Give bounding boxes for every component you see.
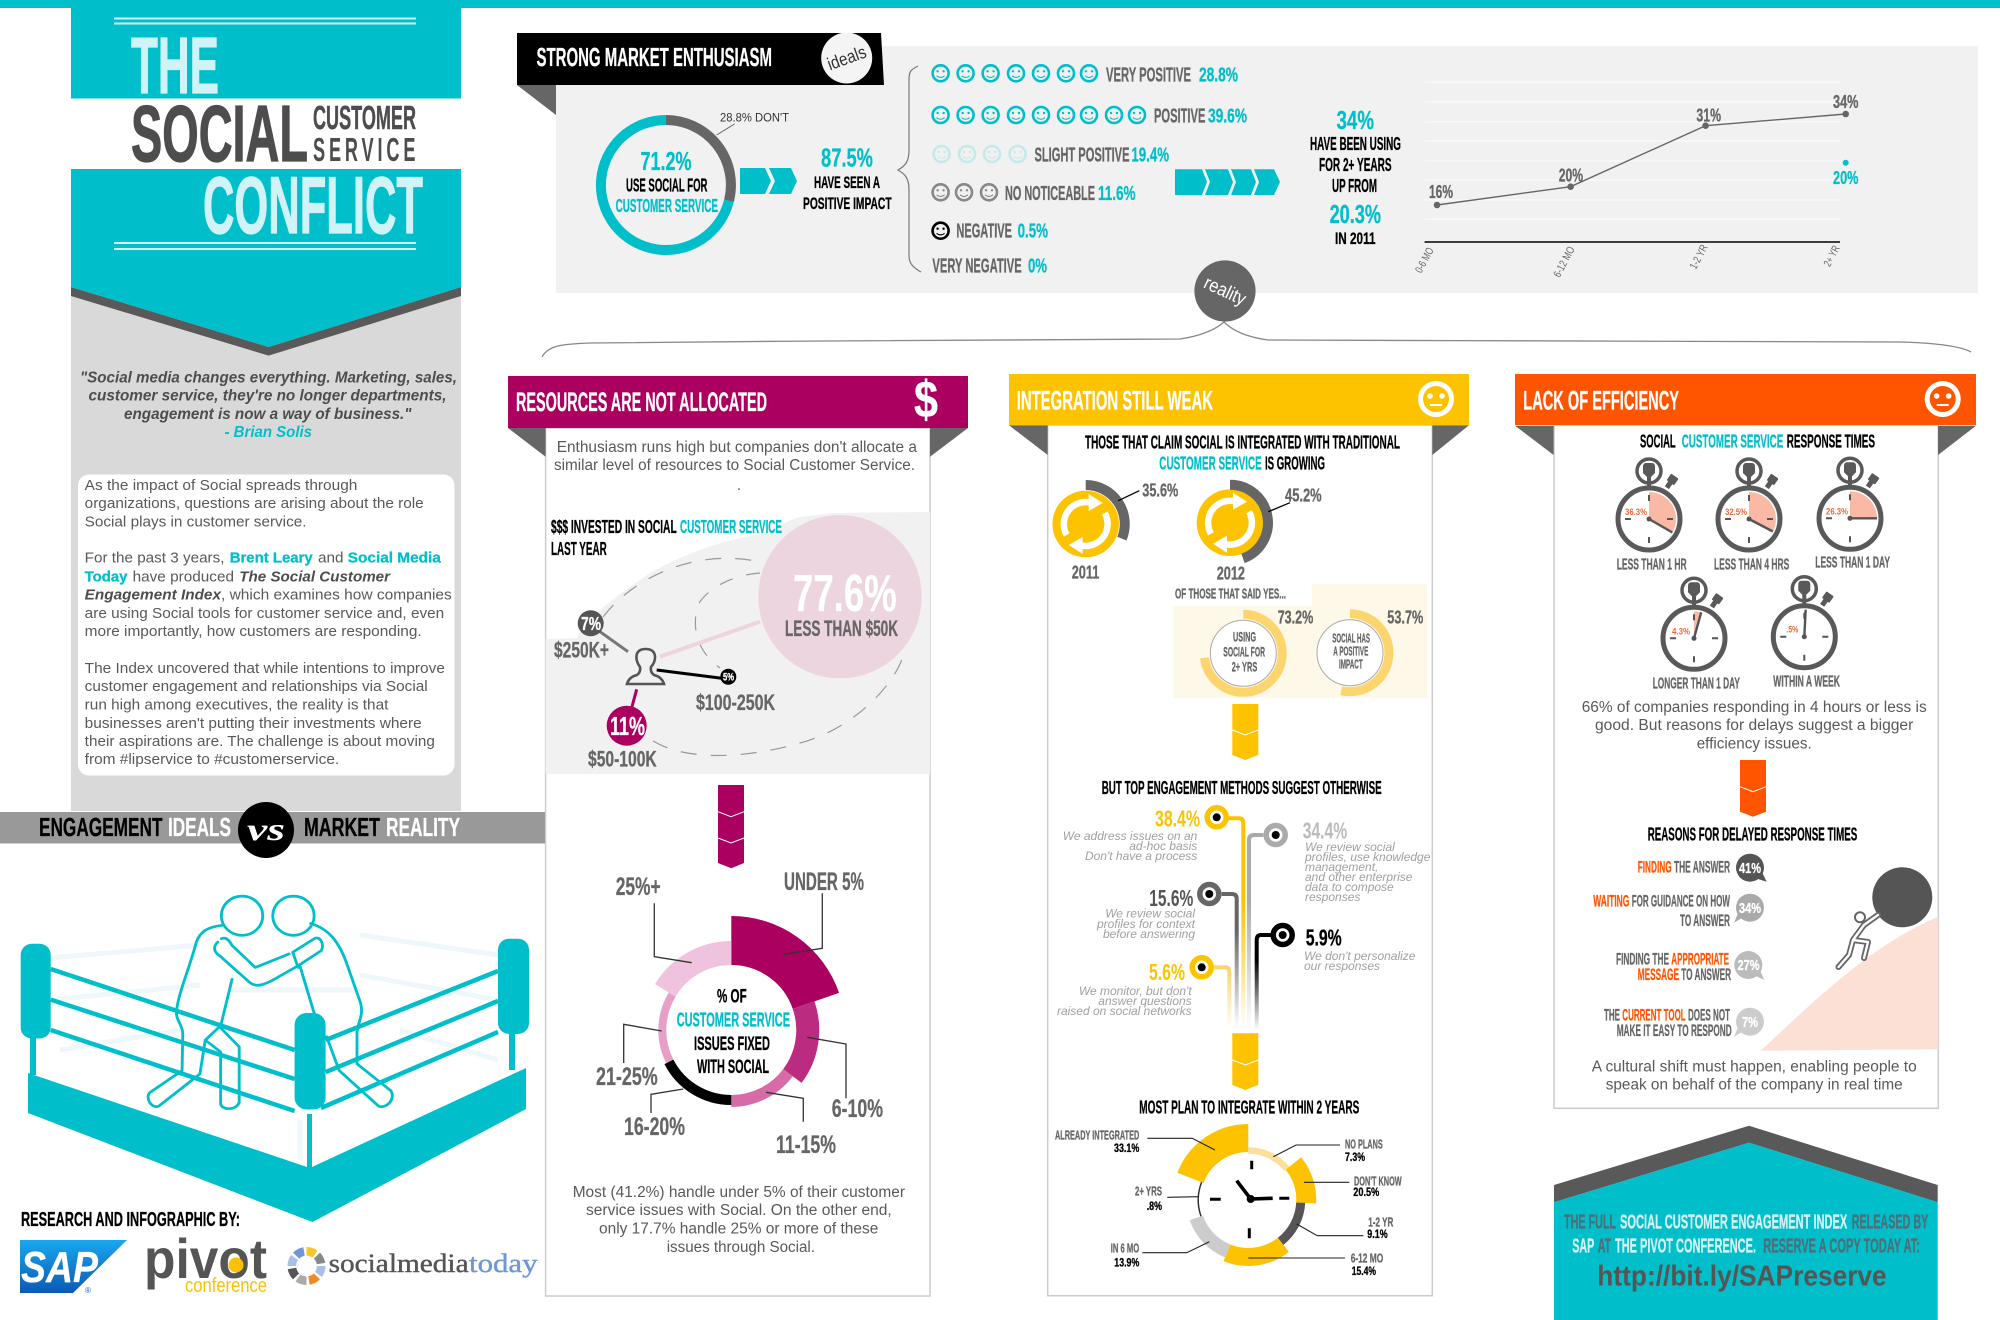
text block: introduction: Today [85,568,128,586]
reason: waiting for guidance [1593,892,1764,930]
chart: engagement methods timeline: We review social [1305,840,1395,854]
text block: introduction: The Index uncovered that while intentions to improve [85,660,445,677]
chart: clock of integration plans: 6-12 MO [1351,1251,1383,1266]
logo: socialmediatoday: socialmedia [329,1249,469,1278]
quote [80,370,457,441]
chart: clock of integration plans: .8% [1147,1199,1162,1213]
chart: % of issues fixed with social [596,868,883,1159]
row: very negative: VERY NEGATIVE [932,256,1022,278]
reason: current tool: 7% [1742,1015,1758,1031]
chart: engagement methods timeline: We review social [1105,906,1195,920]
text block: introduction: from #lipservice to #customerservice. [85,751,339,768]
row: no noticeable: NO NOTICEABLE [1005,183,1095,205]
text block: introduction: more importantly, how customers are responding. [85,623,422,640]
chart: 2011 circle: 35.6% [1142,481,1178,501]
chart: money invested bubbles [551,515,922,772]
row: very positive: 28.8% [1199,65,1238,87]
text block: introduction: run high among executives, the reality is that [85,697,389,714]
reason: finding the appropriate message [1616,949,1764,984]
reason: finding the answer [1638,854,1767,882]
chart: engagement methods timeline: Don't have a process [1085,849,1197,863]
banner: engagement ideals vs market reality: MARKET [304,812,380,842]
line chart: 1-2 YR [1688,243,1711,271]
banner: LACK OF EFFICIENCY [1523,385,1679,415]
chart: engagement methods timeline: profiles for context [1096,917,1196,931]
line chart: 2+ YR [1822,244,1843,269]
stopwatch: less than 1 day [1815,458,1890,572]
text block: introduction: their aspirations are. The challenge is about moving [85,733,435,750]
text block [573,1184,905,1256]
logo: pivot conference: pivot [144,1227,267,1290]
chart: money invested bubbles: 11% [610,711,645,741]
illustration: figure pushing boulder uphill [1761,867,1938,1051]
chart: money invested bubbles: $$$ INVESTED IN SOCIAL [551,516,677,537]
logo: socialmediatoday [285,1245,538,1287]
panel: lack of efficiency [1515,374,1976,1108]
chart: 2011 circle: 2011 [1072,562,1099,582]
chart: engagement methods timeline: 34.4% [1303,817,1347,843]
credits [20,1209,538,1297]
arrow [740,168,797,194]
stat: 34% up from 20.3%: IN 2011 [1335,229,1376,248]
stat: 34% up from 20.3%: 34% [1336,105,1374,135]
stopwatch: within a week [1773,577,1840,691]
stat: 34% up from 20.3%: UP FROM [1332,176,1377,196]
line chart: 0-6 MO [1413,245,1437,275]
row: slight positive: 19.4% [1131,145,1169,167]
chart: engagement methods timeline: and other enterprise [1305,870,1413,884]
banner [508,371,968,429]
stopwatch: less than 1 day: LESS THAN 1 DAY [1815,555,1890,572]
fold right [1432,425,1469,455]
chart: engagement methods timeline: We don't personalize [1304,949,1416,963]
quote: "Social media changes everything. Marketing, sales, [80,370,457,386]
text block [554,439,917,494]
chart: engagement methods timeline: We address issues on an [1063,829,1198,843]
stopwatch: less than 1 hr: LESS THAN 1 HR [1617,556,1687,573]
chart: money invested bubbles: $50-100K [588,747,657,772]
chart: % of issues fixed with social: WITH SOCIAL [697,1056,769,1078]
banner fold [517,85,556,115]
chart: % of issues fixed with social: UNDER 5% [784,868,864,896]
banner [1515,374,1976,425]
panel: call to action: AT [1598,1235,1611,1257]
quote: customer service, they're no longer departments, [88,388,446,404]
text block [1582,699,1927,752]
reason: finding the answer: THE ANSWER [1674,858,1730,877]
reason: current tool: CURRENT TOOL [1622,1006,1686,1025]
panel: integration still weak [1009,374,1469,1296]
heading: CONFLICT: CONFLICT [203,161,423,251]
logo: socialmediatoday: today [469,1249,538,1278]
stopwatch: longer than 1 day: LONGER THAN 1 DAY [1653,675,1740,692]
text block: introduction: are using Social tools for customer service and, even [85,605,444,622]
panel: call to action: THE FULL [1564,1211,1616,1233]
panel: call to action: THE PIVOT CONFERENCE. [1615,1235,1756,1257]
figures: two wrestlers [148,896,392,1109]
fold right [930,428,968,457]
chart: 2011 circle [1052,481,1178,582]
text block: Enthusiasm runs high but companies don't allocate a [557,439,917,456]
chart: money invested bubbles: LAST YEAR [551,538,607,559]
panel: resources are not allocated [508,371,968,1256]
row: negative: 0.5% [1018,221,1048,243]
chart: 2012 circle: 45.2% [1285,486,1322,506]
panel: call to action: RELEASED BY [1852,1211,1929,1233]
text block: introduction: The Social Customer [239,568,391,586]
cream panel: of those that said yes: 2+ YRS [1232,659,1257,675]
donut: 71.2% use social: 28.8% DON'T [720,111,790,125]
text block: efficiency issues. [1697,736,1812,752]
row: slight positive: SLIGHT POSITIVE [1034,145,1130,167]
stopwatch: less than 4 hrs: LESS THAN 4 HRS [1714,556,1789,573]
text block: speak on behalf of the company in real time [1606,1076,1903,1094]
donut: 71.2% use social: CUSTOMER SERVICE [616,196,718,216]
banner: engagement ideals vs market reality: REALITY [386,812,460,842]
row: very positive [933,65,1238,87]
heading: CUSTOMER SERVICE [1159,453,1262,473]
text block [1592,1058,1917,1094]
stopwatch: within a week: .5% [1786,625,1799,636]
chart: % of issues fixed with social: 21-25% [596,1063,658,1091]
heading: CUSTOMER SERVICE [1682,430,1783,451]
illustration: wrestlers in boxing ring [21,896,529,1222]
row: very positive: VERY POSITIVE [1106,65,1191,87]
text block: issues through Social. [667,1239,815,1256]
chart: 2012 circle: 2012 [1217,563,1245,583]
reason: finding the appropriate message: APPROPRIATE [1671,949,1729,968]
chart: money invested bubbles: LESS THAN $50K [785,616,898,641]
chart: engagement methods timeline: answer questions [1098,994,1192,1008]
cream panel: of those that said yes: 73.2% [1278,607,1313,627]
line chart: 34% [1833,92,1858,112]
panel: call to action: http://bit.ly/SAPreserve [1597,1261,1887,1293]
cream panel: of those that said yes: IMPACT [1339,656,1363,671]
text block: good. But reasons for delays suggest a bigger [1595,717,1913,734]
reason: finding the appropriate message: 27% [1738,958,1760,974]
text block: introduction: , which examines how companies [221,586,452,603]
chart: clock of integration plans: 7.3% [1345,1150,1365,1164]
chart: % of issues fixed with social: 16-20% [624,1113,685,1141]
text block: introduction: and [318,550,344,567]
heading: CUSTOMER: CUSTOMER [313,99,416,136]
donut: 71.2% use social: USE SOCIAL FOR [626,176,708,196]
panel: title [71,8,461,811]
chart: % of issues fixed with social: 6-10% [832,1095,883,1123]
chart: engagement methods timeline: 5.6% [1149,959,1185,985]
chart: engagement methods timeline [1057,806,1431,1030]
chart: clock of integration plans: DON'T KNOW [1354,1173,1402,1188]
text block: 66% of companies responding in 4 hours or less is [1582,699,1927,716]
text block: Most (41.2%) handle under 5% of their customer [573,1184,905,1201]
text block: similar level of resources to Social Customer Service. [554,457,915,474]
reason: finding the appropriate message: MESSAGE [1638,965,1679,984]
stopwatch: less than 1 hr [1617,459,1687,573]
chart: clock of integration plans: 15.4% [1352,1264,1376,1278]
panel: resources body [546,428,930,1296]
line chart: 16% [1429,182,1453,202]
heading: IS GROWING [1265,453,1325,473]
reason: finding the answer: 41% [1739,861,1761,877]
chart: % of issues fixed with social: 25%+ [616,873,661,901]
credits: RESEARCH AND INFOGRAPHIC BY: [21,1209,240,1231]
chart: clock of integration plans: ALREADY INTEGRATED [1055,1127,1139,1142]
banner: engagement ideals vs market reality: IDEALS [168,812,231,842]
reason: current tool [1604,1006,1764,1040]
reason: finding the appropriate message: FINDING THE [1616,949,1669,968]
badge: ideals: ideals [824,42,869,74]
chart: clock of integration plans [1055,1127,1402,1278]
stopwatch: longer than 1 day [1653,578,1740,692]
chart: clock of integration plans: IN 6 MO [1111,1240,1139,1255]
chart: engagement methods timeline: We monitor, but don't [1079,984,1192,998]
banner: heading [517,33,884,85]
donut: 71.2% use social: 71.2% [640,146,692,176]
line chart: 6-12 MO [1552,244,1578,280]
fold right [1938,426,1976,455]
text block: introduction: Engagement Index [85,586,222,603]
badge: reality [1194,260,1256,322]
stopwatch: longer than 1 day: 4.3% [1672,626,1690,637]
cream panel: of those that said yes: OF THOSE THAT SAID YES... [1175,586,1286,602]
line chart [1413,82,1858,280]
chart: % of issues fixed with social: ISSUES FIXED [694,1033,770,1055]
chart: clock of integration plans: 33.1% [1114,1141,1140,1155]
logo: pivot conference: conference [185,1275,267,1297]
stat: 87.5% [803,143,892,213]
chart: engagement methods timeline: responses [1305,890,1360,904]
chart: engagement methods timeline: our responses [1304,959,1380,973]
text block: introduction: customer engagement and relationships via Social [85,678,428,695]
cream panel: of those that said yes: SOCIAL HAS [1332,631,1370,646]
badge: reality: reality [1200,273,1250,310]
text block: introduction: businesses aren't putting their investments where [85,715,422,732]
banner: engagement ideals vs market reality: vs [247,811,285,847]
cream panel: of those that said yes [1173,584,1428,698]
chart: money invested bubbles: 77.6% [793,565,897,623]
panel: strong market enthusiasm [517,32,1978,293]
arrow [1175,169,1280,195]
row: negative: NEGATIVE [956,221,1012,243]
fold left [1009,425,1048,455]
line chart: 31% [1696,106,1721,126]
text block: . [737,477,741,494]
stopwatch: less than 1 day: 26.3% [1826,506,1848,517]
chart: engagement methods timeline: raised on social networks [1057,1004,1192,1018]
chart: clock of integration plans: NO PLANS [1345,1136,1383,1151]
text block: introduction: For the past 3 years, [85,550,224,567]
stat: 34% up from 20.3%: FOR 2+ YEARS [1319,155,1392,175]
text block: service issues with Social. On the other end, [586,1202,892,1219]
text block: introduction: have produced [133,568,234,586]
chart: clock of integration plans: 13.9% [1114,1256,1140,1270]
chart: clock of integration plans: 20.5% [1353,1185,1380,1199]
badge: ideals [821,32,872,84]
cream panel: of those that said yes: SOCIAL FOR [1223,644,1265,660]
line chart: 20% [1833,168,1858,188]
heading: THE: THE [131,21,219,110]
heading: RESPONSE TIMES [1787,430,1875,451]
quote: engagement is now a way of business." [124,406,412,423]
reason: finding the appropriate message: TO ANSWER [1681,965,1731,984]
stopwatch: less than 4 hrs: 32.5% [1725,507,1747,518]
chart: engagement methods timeline: profiles, use knowledge [1304,850,1431,864]
stat: 34% up from 20.3%: HAVE BEEN USING [1310,134,1401,154]
text block: introduction: Social plays in customer service. [85,513,306,530]
row: positive: 39.6% [1208,106,1247,128]
stat: 87.5%: POSITIVE IMPACT [803,194,892,213]
reason: waiting for guidance: 34% [1739,901,1761,917]
stopwatch: less than 4 hrs [1714,459,1789,573]
banner: engagement ideals vs market reality [0,802,545,858]
panel: call to action: SAP [1572,1235,1594,1257]
heading: THOSE THAT CLAIM SOCIAL IS INTEGRATED WITH TRADITIONAL [1085,432,1400,452]
stat: 34% up from 20.3% [1310,105,1401,248]
chart: % of issues fixed with social: % OF [717,986,747,1008]
arrow down [1740,760,1766,817]
row: no noticeable [933,183,1136,205]
text block: A cultural shift must happen, enabling people to [1592,1058,1917,1076]
stat: 87.5%: HAVE SEEN A [814,173,880,192]
text block: introduction: Brent Leary [230,550,313,567]
chart: money invested bubbles: CUSTOMER SERVICE [680,516,782,537]
banner: $ [914,371,938,429]
top bar [0,0,2000,8]
chart: money invested bubbles: $250K+ [554,638,609,663]
quote: - Brian Solis [224,424,312,441]
banner: RESOURCES ARE NOT ALLOCATED [516,387,767,417]
reason: waiting for guidance: FOR GUIDANCE ON HOW [1632,892,1730,911]
arrow down [1232,704,1258,760]
stat: 87.5%: 87.5% [821,143,873,173]
chart: engagement methods timeline: data to compose [1305,880,1394,894]
row: very negative: 0% [1028,256,1047,278]
chart: 2012 circle [1197,485,1322,583]
row: no noticeable: 11.6% [1098,183,1136,205]
chart: engagement methods timeline: management, [1305,860,1378,874]
brace [898,66,921,272]
chart: engagement methods timeline: 38.4% [1155,806,1200,832]
chart: money invested bubbles: $100-250K [696,690,775,715]
logo: SAP: ® [85,1286,91,1295]
arrow down [718,785,744,868]
chart: clock of integration plans: 9.1% [1367,1227,1388,1241]
banner: INTEGRATION STILL WEAK [1017,385,1213,415]
text block: introduction [78,474,454,776]
panel: call to action [1554,1126,1938,1320]
arrow down [1232,1033,1258,1090]
logo: SAP: SAP [21,1243,99,1292]
text block: only 17.7% handle 25% or more of these [599,1220,878,1238]
heading: MOST PLAN TO INTEGRATE WITHIN 2 YEARS [1139,1096,1359,1117]
chart: engagement methods timeline: 15.6% [1149,885,1193,911]
row: positive [933,106,1247,128]
reason: current tool: DOES NOT [1688,1006,1730,1025]
chart: engagement methods timeline: ad-hoc basis [1129,839,1197,853]
chart: % of issues fixed with social: CUSTOMER SERVICE [677,1010,790,1032]
reason: current tool: THE [1604,1006,1620,1025]
chart: % of issues fixed with social: 11-15% [776,1131,836,1159]
heading: SERVICE: SERVICE [313,131,419,168]
donut: 71.2% use social [601,111,790,250]
reason: waiting for guidance: WAITING [1593,892,1629,911]
stopwatch: less than 1 hr: 36.3% [1625,507,1647,518]
reason: finding the answer: FINDING [1638,858,1672,877]
heading [1085,432,1400,473]
stopwatch: within a week: WITHIN A WEEK [1773,674,1840,691]
stat: 34% up from 20.3%: 20.3% [1330,199,1381,229]
cream panel: of those that said yes: 53.7% [1387,607,1423,627]
chart: clock of integration plans: 1-2 YR [1368,1215,1394,1230]
text block: introduction: Social Media [348,550,441,567]
banner: engagement ideals vs market reality: ENGAGEMENT [39,812,163,842]
banner: heading: STRONG MARKET ENTHUSIASM [536,42,772,72]
chart: clock of integration plans: 2+ YRS [1135,1183,1162,1198]
heading: SOCIAL [1640,430,1676,451]
row: positive: POSITIVE [1154,106,1205,128]
text block: introduction: As the impact of Social spreads through [85,477,357,494]
cream panel: of those that said yes: USING [1233,629,1256,645]
chart: engagement methods timeline: 5.9% [1306,925,1342,951]
text block: introduction: organizations, questions are arising about the role [85,495,424,512]
reason: current tool: MAKE IT EASY TO RESPOND [1617,1021,1732,1040]
chart: money invested bubbles: 5% [723,672,734,684]
reason: waiting for guidance: TO ANSWER [1680,911,1730,930]
fold left [1515,426,1554,455]
cream panel: of those that said yes: A POSITIVE [1333,643,1368,658]
connector curves [542,322,1971,357]
heading: BUT TOP ENGAGEMENT METHODS SUGGEST OTHERWISE [1102,777,1382,798]
chart: engagement methods timeline: before answering [1103,927,1195,941]
heading: SOCIAL: SOCIAL [131,89,308,178]
chart: money invested bubbles: 7% [581,614,601,634]
row: slight positive [934,145,1169,167]
line chart: 20% [1559,166,1583,186]
fold left [508,428,546,457]
banner [1009,374,1469,425]
